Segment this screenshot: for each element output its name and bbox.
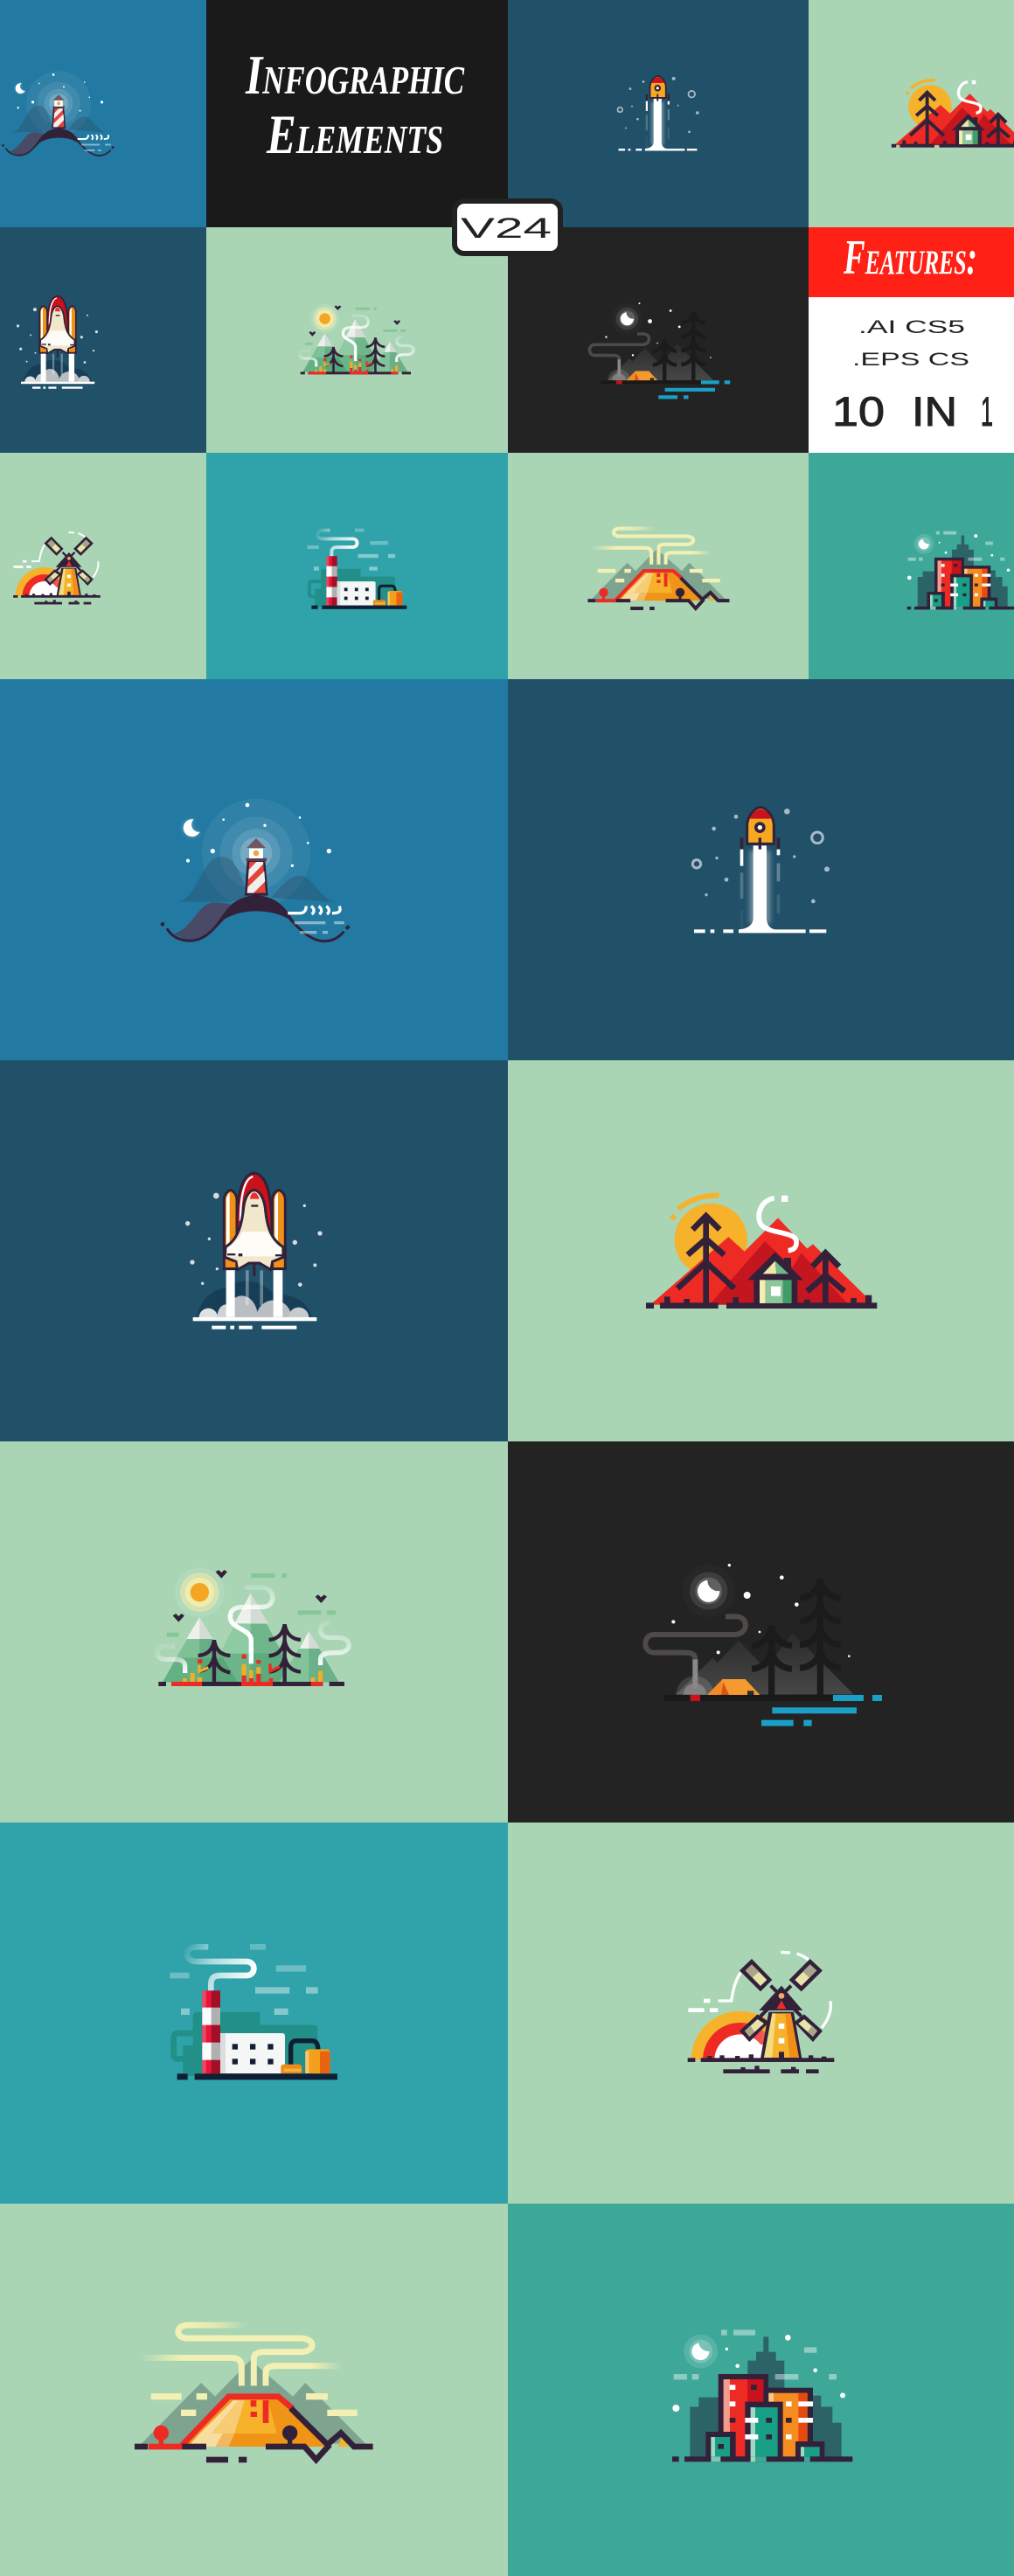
illustration: mountain house (646, 1195, 877, 1309)
illustration: space shuttle (185, 1173, 323, 1330)
panel: factory thumbnail (206, 453, 508, 679)
sun (175, 1567, 225, 1617)
lighthouse tower (245, 838, 268, 896)
ground (646, 1295, 877, 1309)
pine trees (198, 1624, 301, 1683)
panel: forest fire (156, 1570, 351, 1686)
smoke trail (645, 1616, 746, 1689)
moon (683, 1565, 735, 1617)
sea waves (288, 906, 344, 934)
illustration: city (672, 2330, 852, 2461)
crescent moon (184, 819, 200, 837)
chimney smoke (759, 1196, 796, 1251)
windows (718, 2385, 813, 2449)
panel: features (809, 227, 1014, 453)
cabin (747, 1252, 803, 1304)
title line: Elements: Elements (266, 103, 443, 165)
panel: windmill thumbnail (13, 531, 101, 605)
ground line (158, 1682, 344, 1686)
ground (688, 2052, 834, 2073)
clouds (167, 1573, 336, 1637)
clouds (151, 2393, 358, 2416)
panel: volcano thumbnail (587, 526, 729, 611)
grey mountains (142, 2360, 365, 2444)
illustration: lighthouse (161, 799, 351, 941)
panel: lighthouse (0, 679, 508, 1060)
clouds (170, 1944, 318, 2015)
panel: city thumbnail (809, 453, 1014, 679)
volcano outline (149, 2397, 373, 2460)
teal building (745, 2402, 783, 2459)
stars (186, 803, 331, 867)
illustration: night camp (645, 1564, 882, 1726)
panel: house thumbnail (892, 79, 1014, 148)
sun and arc (670, 1195, 747, 1276)
mountains (163, 1594, 339, 1682)
exhaust clouds (199, 1295, 309, 1317)
panel: lighthouse thumbnail (0, 0, 206, 227)
panel: forest thumbnail (299, 305, 415, 374)
light halo (202, 799, 310, 907)
features list: .AI CS5 (858, 317, 965, 337)
smoke trails (157, 1587, 349, 1673)
small left house (705, 2432, 736, 2458)
storage tanks (281, 2049, 330, 2073)
exhaust columns (226, 1269, 282, 1317)
version badge: V24 (461, 212, 552, 244)
striped chimney (202, 1990, 220, 2073)
features list: IN (912, 388, 957, 434)
rocket body (747, 807, 774, 850)
red mountains (650, 1218, 867, 1305)
clouds (674, 2330, 837, 2379)
mountains (676, 1633, 854, 1694)
panel: night camp thumbnail (508, 227, 809, 453)
tent (707, 1679, 760, 1695)
orange building (763, 2388, 813, 2458)
illustration: forest (157, 1567, 349, 1686)
pine trees (752, 1580, 841, 1696)
illustration: rocket (692, 807, 830, 933)
panel: space shuttle (0, 1060, 508, 1441)
dark smoke dome (197, 1281, 312, 1317)
features list: 1 (981, 388, 993, 434)
features list: 10 (832, 388, 885, 434)
volcano body (181, 2399, 349, 2447)
lava drips (251, 2400, 268, 2423)
features list: .EPS CS (852, 350, 969, 370)
illustration: windmill (688, 1952, 834, 2073)
stars (671, 1564, 851, 1657)
ground (672, 2456, 852, 2461)
solid boosters (224, 1190, 285, 1269)
stars (185, 1193, 323, 1287)
panel: shuttle thumbnail (0, 227, 206, 453)
panel: volcano (135, 2322, 373, 2464)
version badge (455, 201, 560, 253)
flames (183, 1655, 323, 1682)
speed lines (740, 837, 780, 927)
pine trees (677, 1215, 844, 1304)
ground (177, 2073, 337, 2080)
launch ground dashes (694, 929, 826, 933)
exhaust plume (739, 845, 806, 933)
wind lines (719, 1952, 830, 2050)
launch pad line (193, 1317, 316, 1330)
birds (173, 1570, 327, 1622)
island wave (161, 895, 351, 941)
trees and ground (135, 2426, 297, 2462)
panel: rocket thumbnail (508, 0, 809, 227)
panel: mountain house (646, 1192, 878, 1309)
red building (719, 2374, 768, 2459)
stars (672, 2335, 845, 2412)
foreground hill (173, 902, 234, 941)
small right house (795, 2441, 824, 2457)
ground and water lines (664, 1695, 882, 1726)
stars and rings (692, 809, 830, 903)
white building (220, 2033, 285, 2073)
orbiter (224, 1191, 285, 1276)
panel: title block (206, 0, 508, 227)
chimney smoke (187, 1947, 254, 1990)
panel: windmill (687, 1951, 834, 2073)
back skyline (690, 2336, 842, 2457)
illustration: volcano (135, 2325, 373, 2462)
features list (809, 297, 1014, 453)
campfire glow (676, 1676, 714, 1695)
sunset rainbow (691, 2011, 789, 2060)
features header (809, 227, 1014, 297)
smoke columns (142, 2325, 343, 2385)
panel: city (508, 2204, 1014, 2576)
moon (684, 2335, 718, 2368)
mill tower (760, 2012, 802, 2059)
mill sails (740, 1959, 823, 2042)
pipe (291, 2041, 318, 2066)
illustration: factory (170, 1944, 337, 2080)
panel: rocket (508, 679, 1014, 1060)
background building (174, 2012, 317, 2076)
panel: night camp (508, 1441, 1014, 1823)
external tank (237, 1173, 272, 1235)
background hills (177, 857, 337, 902)
title line: Infographic: Infographic (245, 44, 465, 106)
mill cap (759, 1986, 802, 2010)
panel: factory (0, 1823, 508, 2204)
